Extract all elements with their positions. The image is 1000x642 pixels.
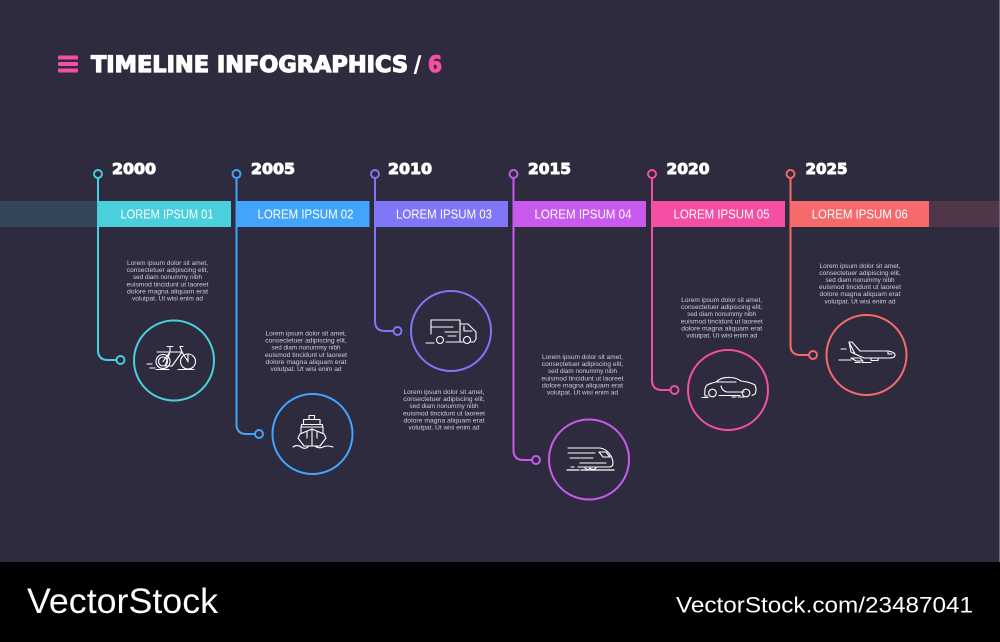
footer url: VectorStock.com/23487041 [676,592,973,618]
text block: volutpat. Ut wisi enim ad [408,426,480,432]
milestone 2025 [786,160,929,395]
text block: Lorem ipsum dolor sit amet, [820,264,901,270]
text block: volutpat. Ut wisi enim ad [132,296,203,302]
text block: sed diam nonummy nibh [272,346,340,352]
end dot [532,456,540,464]
text block: euismod tincidunt ut laoreet [403,411,485,417]
end dot [670,386,678,394]
icon: car [702,377,756,398]
text block: dolore magna aliquam erat [404,418,485,424]
milestone 2010 [371,160,508,432]
connector line [652,178,671,390]
icon: truck [426,320,476,344]
label bar [98,201,231,227]
icon: train [567,448,614,470]
text block: dolore magna aliquam erat [681,326,763,332]
milestone 2015 [510,160,646,500]
milestone 2020 [648,160,785,430]
milestone 2000 [94,160,231,400]
text block: consectetuer adipiscing elit, [265,339,347,345]
text block: consectetuer adipiscing elit, [542,362,624,368]
text block: euismod tincidunt ut laoreet [541,376,624,382]
top marker [94,170,102,178]
text block: sed diam nonummy nibh [548,369,617,375]
label: LOREM IPSUM 03 [396,207,492,221]
text block: dolore magna aliquam erat [266,360,347,366]
icon: ship [293,416,333,448]
text block: euismod tincidunt ut laoreet [265,353,347,359]
text block: euismod tincidunt ut laoreet [681,319,763,325]
label: LOREM IPSUM 06 [812,207,908,221]
label bar [236,201,370,227]
text block: Lorem ipsum dolor sit amet, [542,355,623,361]
icon circle [411,291,491,371]
text block: consectetuer adipiscing elit, [127,268,209,274]
connector line [236,178,256,434]
top marker [232,170,240,178]
label bar [514,201,646,227]
text block: volutpat. Ut wisi enim ad [270,367,342,373]
text block [403,390,485,432]
icon circle [134,320,214,400]
text block: dolore magna aliquam erat [820,292,901,298]
connector line [514,178,532,460]
year: 2000 [112,160,156,178]
label: LOREM IPSUM 01 [120,207,214,221]
top marker [510,170,518,178]
text block: Lorem ipsum dolor sit amet, [404,390,485,396]
icon: menu [58,56,78,72]
label: LOREM IPSUM 05 [674,207,770,221]
title: TIMELINE INFOGRAPHICS [91,53,408,78]
label bar [790,201,929,227]
text block: sed diam nonummy nibh [826,278,894,284]
icon circle [688,350,768,430]
top marker [648,170,656,178]
text block: Lorem ipsum dolor sit amet, [127,261,208,267]
footer bar [0,562,1000,642]
connector line [98,178,117,360]
timeline band: right fade [929,201,1000,227]
connector line [790,178,810,355]
text block: sed diam nonummy nibh [687,312,756,318]
text block: dolore magna aliquam erat [542,383,623,389]
end dot [116,356,124,364]
text block: dolore magna aliquam erat [127,289,208,295]
end dot [394,327,402,335]
year: 2025 [806,160,848,178]
icon circle [549,420,629,500]
text block: Lorem ipsum dolor sit amet, [266,332,347,338]
text block: volutpat. Ut wisi enim ad [824,299,896,305]
end dot [809,351,817,359]
right edge line [999,0,1000,562]
timeline band: left fade [0,201,98,227]
text block: sed diam nonummy nibh [133,275,202,281]
text block: sed diam nonummy nibh [410,404,478,410]
year: 2005 [251,160,295,178]
icon circle [826,315,906,395]
label: LOREM IPSUM 04 [534,207,632,221]
connector line [375,178,394,331]
title: / [414,53,422,78]
text block: volutpat. Ut wisi enim ad [686,334,757,340]
year: 2010 [388,160,432,178]
text block [681,298,763,340]
text block: consectetuer adipiscing elit, [819,271,901,277]
text block: consectetuer adipiscing elit, [403,397,485,403]
text block: euismod tincidunt ut laoreet [819,285,901,291]
text block: Lorem ipsum dolor sit amet, [681,298,763,304]
year: 2015 [528,160,571,178]
year: 2020 [666,160,710,178]
top marker [786,170,794,178]
text block [819,264,901,305]
icon: bicycle [147,346,196,370]
footer logo: VectorStock [27,582,219,621]
icon circle [272,394,352,474]
text block: consectetuer adipiscing elit, [681,305,763,311]
label bar [375,201,508,227]
text block [542,355,624,396]
text block: volutpat. Ut wisi enim ad [547,390,618,396]
milestone 2005 [232,160,370,474]
text block [265,332,347,373]
label bar [652,201,785,227]
text block [126,261,209,302]
icon: airplane [839,342,895,362]
top marker [371,170,379,178]
label: LOREM IPSUM 02 [258,207,354,221]
title: 6 [428,53,442,78]
text block: euismod tincidunt ut laoreet [126,282,209,288]
end dot [255,430,263,438]
